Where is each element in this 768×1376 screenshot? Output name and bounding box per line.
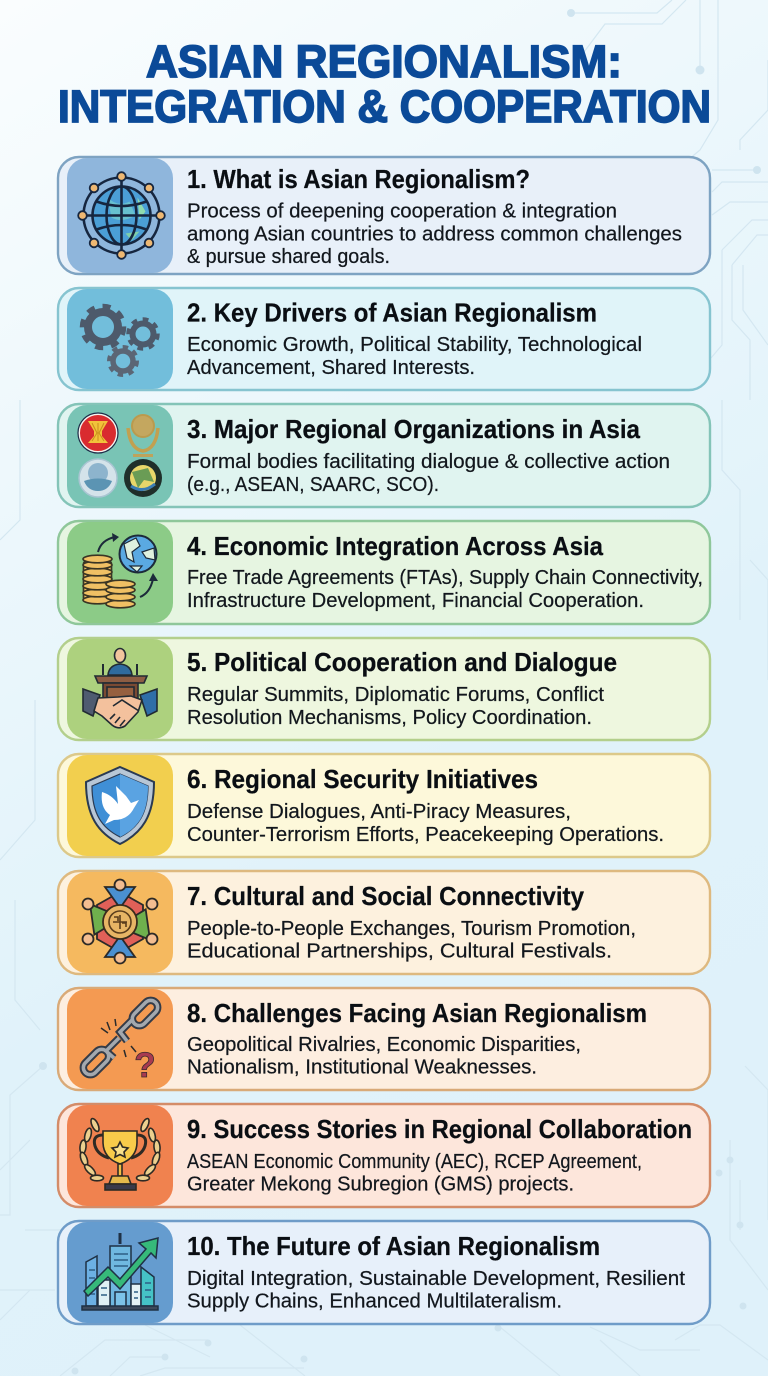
heading: 6. Regional Security Initiatives bbox=[187, 764, 538, 794]
icon: city with growth arrow bbox=[82, 1233, 158, 1310]
description: Greater Mekong Subregion (GMS) projects. bbox=[187, 1174, 574, 1196]
panel: 8 Challenges bbox=[58, 988, 710, 1090]
description: Geopolitical Rivalries, Economic Disparities, bbox=[187, 1034, 581, 1056]
heading: 7. Cultural and Social Connectivity bbox=[187, 881, 584, 911]
heading: 2. Key Drivers of Asian Regionalism bbox=[187, 298, 597, 328]
description bbox=[187, 1034, 581, 1078]
description: Free Trade Agreements (FTAs), Supply Chain Connectivity, bbox=[187, 567, 703, 589]
description bbox=[187, 801, 664, 846]
icon: gears bbox=[82, 306, 158, 375]
description: Counter-Terrorism Efforts, Peacekeeping Operations. bbox=[187, 824, 664, 846]
icon: coins and globe bbox=[83, 533, 158, 608]
icon: globe network bbox=[78, 172, 165, 259]
panel: 2 Key Drivers bbox=[58, 288, 710, 390]
description: Process of deepening cooperation & integration bbox=[187, 200, 617, 222]
title bbox=[58, 36, 711, 132]
icon: podium and handshake bbox=[83, 648, 157, 728]
description: Regular Summits, Diplomatic Forums, Conflict bbox=[187, 684, 604, 706]
icon: people circle with medallion bbox=[82, 880, 158, 964]
heading: 8. Challenges Facing Asian Regionalism bbox=[187, 998, 647, 1028]
description bbox=[187, 1151, 642, 1196]
description: Economic Growth, Political Stability, Technological bbox=[187, 334, 642, 356]
description: Formal bodies facilitating dialogue & collective action bbox=[187, 451, 670, 473]
panel: 10 The Future bbox=[58, 1221, 710, 1324]
description bbox=[187, 684, 604, 729]
icon: trophy with laurels bbox=[79, 1117, 161, 1190]
heading: 9. Success Stories in Regional Collaboration bbox=[187, 1114, 692, 1144]
heading: 10. The Future of Asian Regionalism bbox=[187, 1231, 600, 1261]
panel: 3 Major Regional Organizations bbox=[58, 404, 710, 507]
title: INTEGRATION & COOPERATION bbox=[58, 81, 711, 132]
heading: 4. Economic Integration Across Asia bbox=[187, 531, 603, 561]
description: ASEAN Economic Community (AEC), RCEP Agreement, bbox=[187, 1151, 642, 1173]
panel: 1 What is Asian Regionalism bbox=[58, 157, 710, 274]
description: Nationalism, Institutional Weaknesses. bbox=[187, 1056, 537, 1078]
description bbox=[187, 567, 703, 612]
heading: 1. What is Asian Regionalism? bbox=[187, 164, 530, 194]
description bbox=[187, 918, 636, 962]
description: Supply Chains, Enhanced Multilateralism. bbox=[187, 1290, 562, 1312]
icon: broken chain with question mark bbox=[80, 997, 161, 1085]
icon: shield with dove bbox=[86, 767, 154, 844]
description: among Asian countries to address common challenges bbox=[187, 224, 682, 246]
description: & pursue shared goals. bbox=[187, 246, 390, 268]
heading: 5. Political Cooperation and Dialogue bbox=[187, 647, 617, 677]
description bbox=[187, 1268, 685, 1312]
panel: 7 Cultural and Social bbox=[58, 871, 710, 974]
description: (e.g., ASEAN, SAARC, SCO). bbox=[187, 474, 439, 496]
panel: 5 Political Cooperation bbox=[58, 638, 710, 740]
description: Educational Partnerships, Cultural Festivals. bbox=[187, 940, 612, 962]
heading: 3. Major Regional Organizations in Asia bbox=[187, 414, 640, 444]
description bbox=[187, 334, 642, 379]
title: ASIAN REGIONALISM: bbox=[146, 36, 622, 87]
description: Infrastructure Development, Financial Cooperation. bbox=[187, 590, 644, 612]
panel: 4 Economic Integration bbox=[58, 521, 710, 624]
description bbox=[187, 200, 682, 268]
description: Defense Dialogues, Anti-Piracy Measures, bbox=[187, 801, 571, 823]
panel: 6 Regional Security bbox=[58, 754, 710, 857]
description: Digital Integration, Sustainable Development, Resilient bbox=[187, 1268, 685, 1290]
description: People-to-People Exchanges, Tourism Promotion, bbox=[187, 918, 636, 940]
description: Advancement, Shared Interests. bbox=[187, 357, 475, 379]
icon: broken chain with question mark: ? bbox=[134, 1046, 156, 1085]
description bbox=[187, 451, 670, 496]
description: Resolution Mechanisms, Policy Coordination. bbox=[187, 707, 592, 729]
panel: 9 Success Stories bbox=[58, 1104, 710, 1207]
icon: organization emblems bbox=[78, 413, 162, 497]
